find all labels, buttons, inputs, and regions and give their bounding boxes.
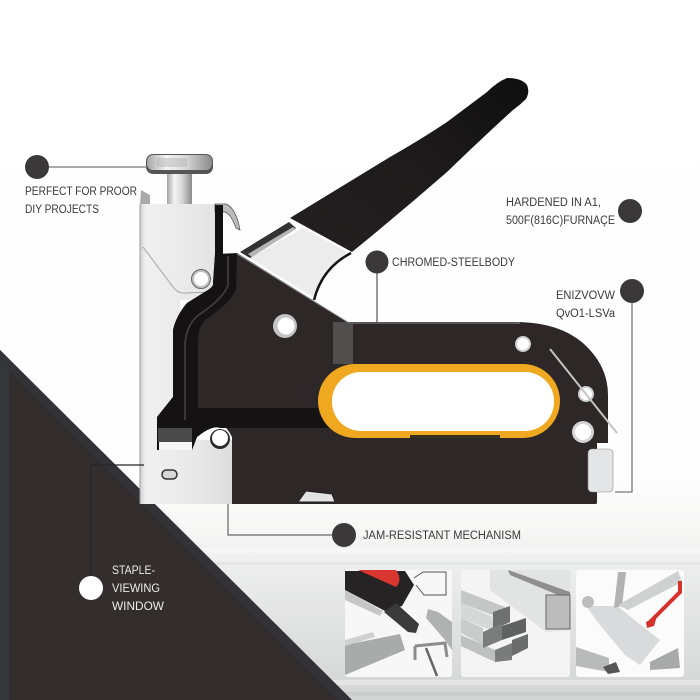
callout: staple-viewing window: STAPLE- [112, 565, 155, 577]
callout: right side label [556, 279, 644, 492]
callout: chromed steel body [366, 250, 515, 322]
staple gun [140, 78, 617, 504]
callout: perfect for DIY [25, 155, 147, 216]
yellow grip window [318, 364, 560, 438]
handle silver lever [240, 222, 351, 300]
callout: perfect for DIY: DIY PROJECTS [25, 204, 99, 216]
bottom slider [298, 491, 335, 502]
spring wire [550, 349, 617, 433]
adjustment knob [146, 154, 213, 205]
callout: hardened furnace: 500F(816C)FURNAÇE [506, 215, 615, 227]
inset photo 2: staple stack [461, 570, 570, 677]
black body [157, 253, 608, 504]
inset photo 3: chrome staple gun [576, 570, 684, 677]
rear latch [588, 449, 613, 492]
callout: chromed steel body: CHROMED-STEELBODY [392, 257, 515, 269]
callout: staple-viewing window [79, 465, 164, 613]
callout: jam-resistant mechanism: JAM-RESISTANT MECHANISM [363, 530, 521, 542]
callout: right side label: QvO1-LSVa [556, 308, 616, 320]
body rivets [162, 314, 594, 479]
callout: staple-viewing window: WINDOW [112, 601, 164, 613]
callout: staple-viewing window: VIEWING [112, 583, 160, 595]
silver front plate [140, 190, 240, 504]
callout: hardened furnace [506, 197, 642, 227]
callout: jam-resistant mechanism [228, 504, 521, 547]
callout: perfect for DIY: PERFECT FOR PROOR [25, 186, 137, 198]
inset photo 1: tool head and staples [345, 570, 452, 677]
callout: right side label: ENIZVOVW [556, 290, 615, 302]
callout: hardened furnace: HARDENED IN A1, [506, 197, 601, 209]
dark triangle panel [0, 350, 352, 700]
handle black grip [290, 78, 528, 252]
